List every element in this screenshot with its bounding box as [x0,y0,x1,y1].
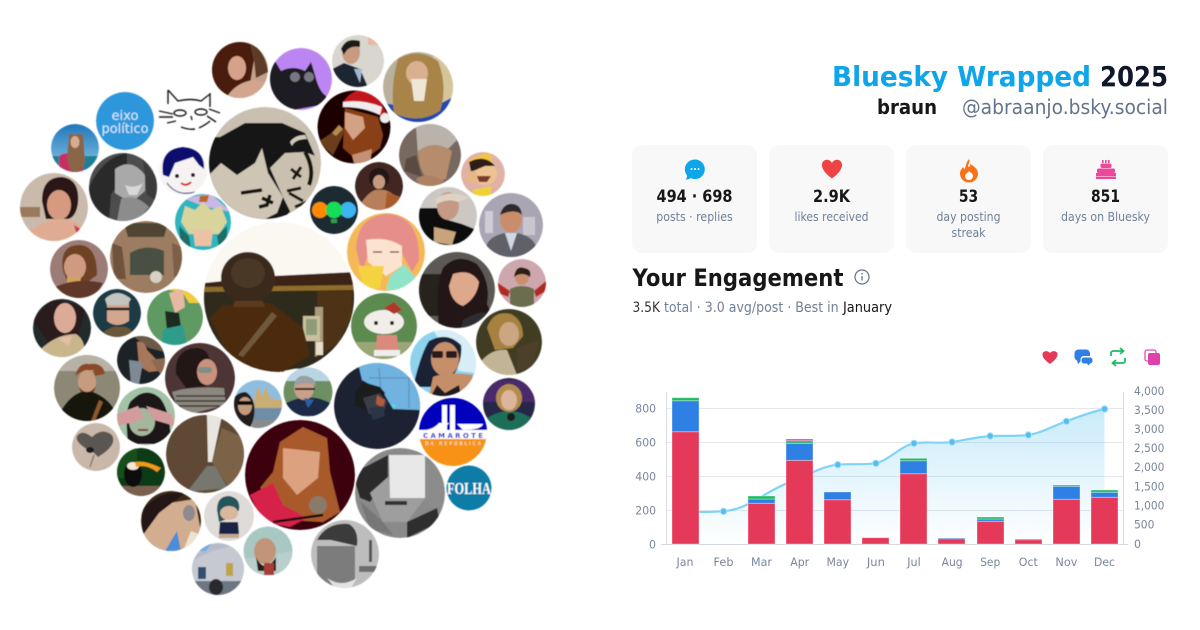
right y axis labels: 3,000 [1134,422,1164,436]
bar: Oct [1015,539,1042,544]
icon: flame [960,159,978,182]
panel: days on Bluesky [1043,145,1168,253]
avatar: hello kitty [351,293,417,359]
panel: posts and replies: posts · replies [656,210,733,224]
avatar: dragon queen [399,124,461,186]
avatar: Camarote da Republica logo: CAMAROTE [423,432,483,440]
icon: quotes legend [1145,350,1160,365]
x axis month labels: Oct [1019,555,1038,569]
avatar: woman covering eyes [117,387,175,445]
x axis month labels: Apr [790,555,809,569]
right y axis labels: 1,000 [1134,498,1164,512]
avatar: angry cartoon girl [461,152,505,196]
left y axis labels: 800 [635,402,656,416]
avatar: line drawing cat [159,90,220,129]
avatar: woman at the beach [51,124,99,172]
right y axis labels: 500 [1134,518,1154,532]
cumulative line [685,409,1104,512]
avatar: anime green figure on yellow [147,289,203,345]
avatar: painted ceiling [110,221,182,293]
bar: Jul [900,458,927,544]
x axis month labels: Mar [751,555,772,569]
x axis month labels [676,555,1115,569]
cumulative line area [685,409,1104,544]
panel: days on Bluesky: 851 [1091,187,1120,207]
avatar: woman with lights [483,378,535,430]
avatar: bearded man with mug [244,526,292,576]
icon: replies legend [1074,349,1092,366]
bar: Apr [786,439,813,544]
bar: Dec [1091,490,1118,544]
avatar: older man with glasses [93,289,141,337]
engagement summary: January [842,300,892,316]
engagement summary: 3.5K [632,300,661,316]
combo chart: monthly engagement [635,384,1164,569]
avatar: laughing woman in black and white [89,153,157,221]
avatar: teal haired cat figure [204,491,254,541]
right y axis labels: 2,500 [1134,441,1164,455]
avatar: Camarote da Republica logo [419,398,487,466]
avatar: blue haired cartoon boy [159,147,207,195]
left y axis labels: 0 [649,538,656,552]
x axis month labels: Dec [1094,555,1115,569]
avatar: Folha logo: FOLHA [447,479,492,498]
avatar: big cats drawing [209,107,321,219]
x axis month labels: Jan [676,555,694,569]
x axis month labels: Feb [714,555,734,569]
panel: posts and replies [632,145,757,253]
avatar: alley photo [166,415,244,493]
chart legend [1042,348,1160,366]
avatar: woman with sunglasses [410,330,476,396]
avatar: man with dog [117,336,165,384]
avatar: eixo politico logo: eixo [112,108,138,124]
right y axis labels: 0 [1134,537,1141,551]
avatar: main profile photo of man from behind [204,222,354,372]
avatar: woman in front of city and lake [234,380,282,428]
bar: Jan [672,398,699,544]
avatar: pink haired anime girl with mug [347,213,425,291]
avatar: black cat with glasses on purple [270,48,332,110]
right y axis labels [1134,384,1164,551]
avatar: painted girl with dog [476,309,542,375]
profile name and handle: braun [877,95,937,119]
panel: likes received: 2.9K [813,187,851,207]
avatar: dark haired woman [419,252,495,328]
left y axis labels [635,402,656,552]
avatar: curly red hair woman [212,42,268,98]
avatar: smiling man in grey sweater [479,193,543,257]
engagement summary: total · 3.0 avg/post · Best in [664,300,839,316]
profile name and handle [877,95,1168,119]
avatar: burgundy painted woman [355,162,403,210]
bar: May [824,492,851,544]
icon: heart [822,160,842,178]
header title: 2025 [1100,60,1168,93]
bar: Sep [977,517,1004,544]
chart gridlines and axes [661,392,1128,544]
avatar: black and white man with white mug [355,448,445,538]
avatar: heart scribble [72,423,120,471]
heading: Your Engagement: Your Engagement [632,264,844,292]
avatar: bearded man painting [54,355,120,421]
avatar: Naruto on coloured background [175,194,231,250]
panel: day posting streak [906,145,1031,253]
x axis month labels: Jul [906,555,921,569]
left y axis labels: 400 [635,470,656,484]
avatar: woman in red top [20,173,88,241]
avatar: blonde with coffee cup [383,52,453,122]
avatar: Camarote da Republica logo: DA REPÚBLICA [425,440,482,447]
avatar: white building photo [192,543,244,595]
avatar: toucan [117,448,165,496]
avatar: leaning woman [141,491,201,551]
panel: days on Bluesky: days on Bluesky [1061,210,1150,224]
left y axis labels: 200 [635,504,656,518]
left y axis labels: 600 [635,436,656,450]
right y axis labels: 4,000 [1134,384,1164,398]
avatar: red haired singer [245,420,355,530]
x axis month labels: Jun [866,555,885,569]
x axis month labels: May [827,555,849,569]
right y axis labels: 2,000 [1134,460,1164,474]
avatar: pale man with mug [419,187,477,245]
header title: Bluesky Wrapped [832,60,1091,93]
icon: likes legend [1042,351,1058,364]
avatar: man in suit [332,35,384,87]
avatar: man in cap black and white [311,520,379,588]
icon: info [855,270,869,284]
avatar: Folha logo [446,466,492,510]
right y axis labels: 1,500 [1134,480,1164,494]
bar: Nov [1053,485,1080,544]
right y axis labels: 3,500 [1134,403,1164,417]
avatar: three coloured dots logo [310,186,358,234]
icon: chat bubble [685,159,705,180]
avatar: woman with santa hat [318,90,390,164]
bar: Mar [748,496,775,544]
avatar: sleeping man painting [334,363,420,449]
avatar: woman eating a burger [50,240,108,298]
avatar: woman with round sunglasses and stripes [165,343,235,413]
panel: likes received [769,145,894,253]
avatar: eixo politico logo: político [102,121,148,137]
bar: Aug [938,538,965,544]
icon: reposts legend [1111,348,1125,366]
panel: likes received: likes received [794,210,868,224]
avatar: eixo politico logo [96,92,154,150]
panel: posts and replies: 494 · 698 [656,187,732,207]
icon: birthday cake [1096,160,1116,179]
avatar: small woman in grey tee [498,259,546,307]
panel: day posting streak: streak [952,226,986,240]
avatar: man with glasses by a lake [284,367,334,416]
x axis month labels: Sep [980,555,1000,569]
panel: day posting streak: 53 [959,187,978,207]
cumulative line points [720,406,1108,514]
bar: Jun [862,538,889,544]
panel: day posting streak: day posting [936,210,1000,224]
stacked bars [672,398,1118,544]
x axis month labels: Aug [942,555,963,569]
profile name and handle: @abraanjo.bsky.social [962,95,1168,119]
avatar cluster [20,35,546,595]
x axis month labels: Nov [1055,555,1078,569]
avatar: woman with long hair selfie [33,299,91,357]
